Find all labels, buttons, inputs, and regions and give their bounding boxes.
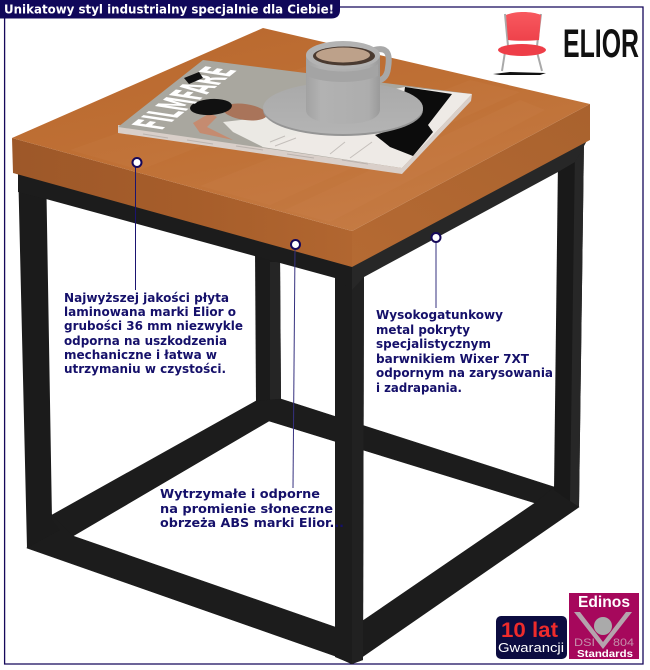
magazine small print [143,134,372,164]
badge: Edinos standards: Edinos [578,594,630,611]
text: board description: utrzymaniu w czystości. [64,362,226,376]
right edge of top [352,104,590,267]
white cover area [262,87,472,168]
badge: 10 years warranty [496,616,567,659]
lower front rails [27,486,579,664]
text: edge description: obrzeża ABS marki Elior... [160,516,344,530]
text: board description: mechaniczne i łatwa w [64,348,217,362]
text: metal description: metal pokryty [376,323,470,337]
text: board description: grubości 36 mm niezwykle [64,319,243,333]
left edge of top [12,138,352,267]
text: edge description [160,487,344,530]
callout: metal frame [376,233,553,395]
ribbed band [307,64,378,82]
text: metal description: barwnikiem Wixer 7XT [376,352,530,366]
badge: Edinos standards: DSI [574,637,595,649]
black shirt [375,87,452,156]
badge: Edinos standards [569,593,639,660]
badge: 10 years warranty: 10 lat [501,619,558,642]
rear leg [255,250,281,404]
man on the cover [189,98,300,147]
label on magazine [184,72,203,84]
coffee cup [306,41,389,124]
top surface [12,28,590,231]
text: board description: laminowana marki Elior o [64,305,236,319]
left front leg [18,165,60,548]
icon: red chair [493,12,546,75]
callout: table top board [64,158,243,376]
text: metal description: odpornym na zarysowania [376,366,553,380]
magazine cover [118,60,472,168]
cup rim [306,41,380,69]
cup body [306,55,380,124]
text: board description [64,291,243,376]
text: metal description [376,308,553,395]
metal table frame [18,135,590,664]
wooden table top [12,28,590,267]
badge: 10 years warranty: Gwarancji [498,641,564,655]
cup handle [374,49,389,80]
text: metal description: Wysokogatunkowy [376,308,503,322]
text: board description: Najwyższej jakości płyta [64,291,229,305]
magazine [118,60,472,174]
right rear leg [554,140,584,507]
coffee [313,46,375,66]
badge: Edinos standards: Standards [577,648,633,660]
upper side rails [18,135,590,290]
badge: Edinos standards: 804 [613,637,634,649]
magazine pages edge [118,94,472,174]
text: board description: odporna na uszkodzenia [64,334,227,348]
magazine title: FILMFARE [122,64,248,132]
wood grain [70,58,545,222]
lower rear rails [52,399,556,536]
text: edge description: na promienie słoneczne [160,502,333,516]
callout: ABS edge [160,240,344,530]
title banner: Unikatowy styl industrialny specjalnie dla Ciebie! [4,2,334,16]
logo: Elior [493,12,639,75]
text: metal description: i zadrapania. [376,381,462,395]
text: metal description: specjalistycznym [376,337,491,351]
front leg [335,262,364,664]
text: edge description: Wytrzymałe i odporne [160,487,320,501]
saucer [263,82,423,136]
